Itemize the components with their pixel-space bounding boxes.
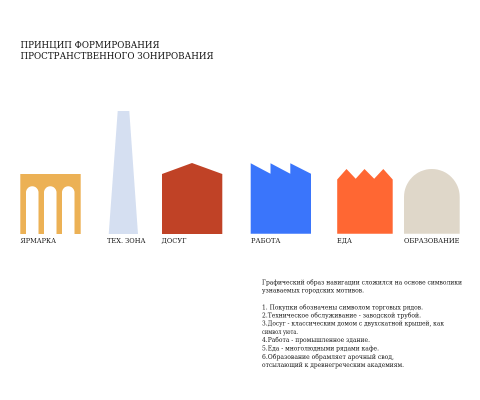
title [20, 40, 214, 62]
title: ПРИНЦИП ФОРМИРОВАНИЯ [20, 40, 160, 51]
description text: 4.Работа - промышленное здание. [262, 337, 370, 344]
label: leisure: ДОСУГ [162, 237, 187, 245]
icon: industrial building [251, 163, 311, 234]
description text: 6.Образование обрамляет арочный свод, [262, 354, 394, 361]
description text: Графический образ навигации сложился на основе символики [262, 280, 462, 286]
label: technical zone: ТЕХ. ЗОНА [107, 237, 146, 245]
label: fair: ЯРМАРКА [20, 237, 57, 245]
label: education: ОБРАЗОВАНИЕ [404, 237, 460, 245]
description text: 3.Досуг - классическим домом с двухскатной крышей, как [262, 321, 444, 328]
icon: gabled house [162, 163, 222, 234]
icon: factory chimney [109, 111, 138, 234]
description text [262, 280, 462, 369]
description text: символ уюта. [262, 329, 298, 336]
icon: cafe rows [337, 169, 393, 234]
title: ПРОСТРАНСТВЕННОГО ЗОНИРОВАНИЯ [20, 51, 214, 62]
icon: fair arcade [20, 174, 81, 234]
description text: отсылающий к древнегреческим академиям. [262, 362, 404, 369]
label: work: РАБОТА [251, 237, 281, 245]
description text: 2.Техническое обслуживание - заводской трубой. [262, 312, 421, 320]
label: food: ЕДА [337, 237, 353, 245]
icon: arched vault [404, 169, 460, 234]
description text: узнаваемых городских мотивов. [262, 288, 364, 295]
description text: 5.Еда - многолюдными рядами кафе. [262, 346, 379, 352]
description text: 1. Покупки обозначены символом торговых рядов. [262, 304, 423, 311]
